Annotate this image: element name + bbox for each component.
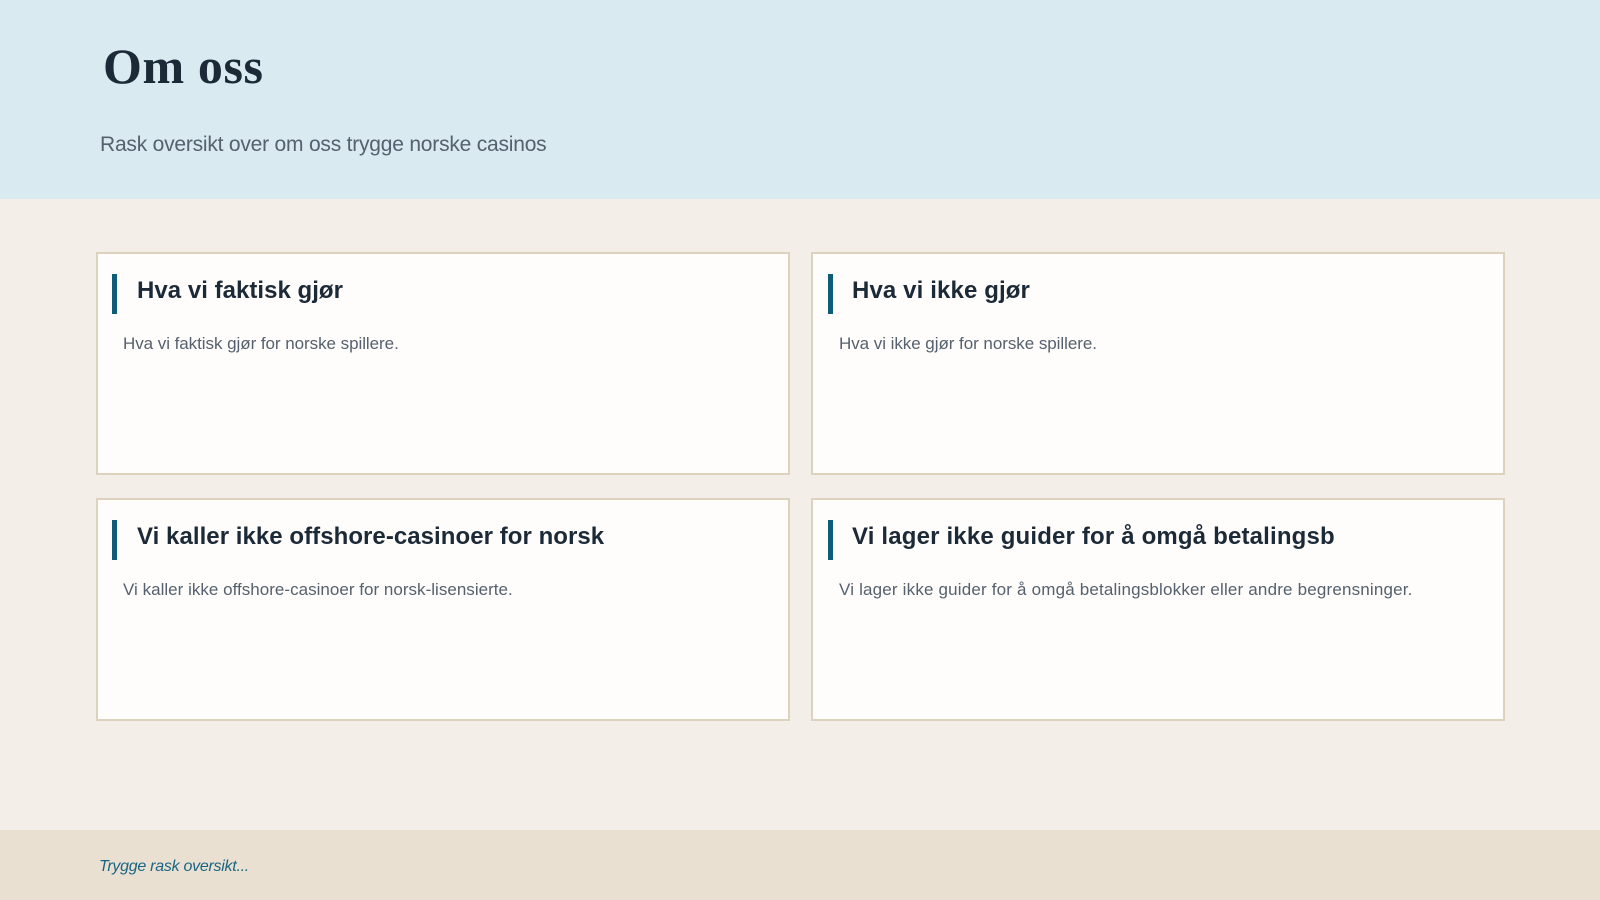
- footer text: Trygge rask oversikt...: [99, 858, 249, 875]
- subtitle: Rask oversikt over om oss trygge norske casinos: [100, 133, 546, 156]
- panel: hva vi faktisk gjør: [96, 252, 790, 475]
- panel: offshore-casinoer: [96, 498, 790, 721]
- accent bar: [828, 520, 833, 560]
- footer band: [0, 830, 1600, 900]
- card text: Hva vi faktisk gjør for norske spillere.: [123, 334, 399, 353]
- card heading: Hva vi ikke gjør: [852, 277, 1030, 304]
- card text: Vi kaller ikke offshore-casinoer for norsk-lisensierte.: [123, 580, 513, 599]
- card text: Hva vi ikke gjør for norske spillere.: [839, 334, 1097, 353]
- accent bar: [112, 274, 117, 314]
- card heading: Hva vi faktisk gjør: [137, 277, 343, 304]
- title: Om oss: [103, 38, 264, 94]
- panel: hva vi ikke gjør: [811, 252, 1505, 475]
- accent bar: [828, 274, 833, 314]
- header band: [0, 0, 1600, 199]
- card heading: Vi lager ikke guider for å omgå betalingsb: [852, 523, 1335, 550]
- card text: Vi lager ikke guider for å omgå betalingsblokker eller andre begrensninger.: [839, 580, 1413, 599]
- panel: betalingsblokker: [811, 498, 1505, 721]
- card heading: Vi kaller ikke offshore-casinoer for norsk: [137, 523, 604, 550]
- accent bar: [112, 520, 117, 560]
